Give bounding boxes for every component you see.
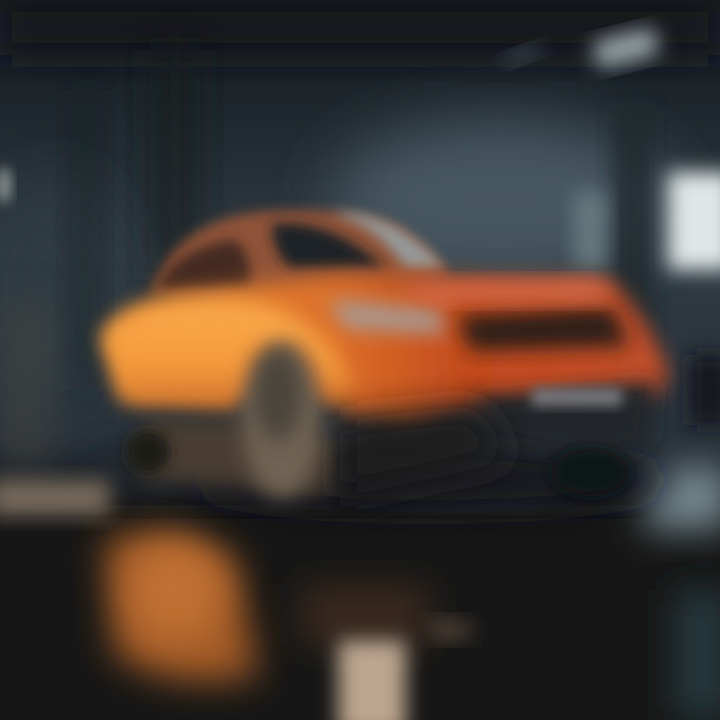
car near wheel [242, 342, 322, 498]
car [102, 210, 670, 512]
ceiling light [0, 27, 660, 203]
window: bright right side [574, 172, 720, 425]
car underbody [140, 420, 340, 495]
car front wheel [550, 448, 630, 496]
car lower bumper [470, 382, 655, 462]
car rear wheel [126, 430, 170, 474]
car roof and cabin [150, 210, 450, 305]
car shadow [190, 448, 670, 512]
car side window [155, 240, 250, 292]
car hood highlight [400, 280, 612, 302]
floor [0, 455, 720, 720]
floor reflection: light [338, 620, 470, 720]
floor reflection: orange [105, 533, 430, 682]
car main body [105, 275, 668, 428]
car windshield [272, 223, 385, 268]
car headlight [328, 300, 445, 334]
car bright side panel [102, 300, 352, 410]
car grille [458, 308, 630, 350]
